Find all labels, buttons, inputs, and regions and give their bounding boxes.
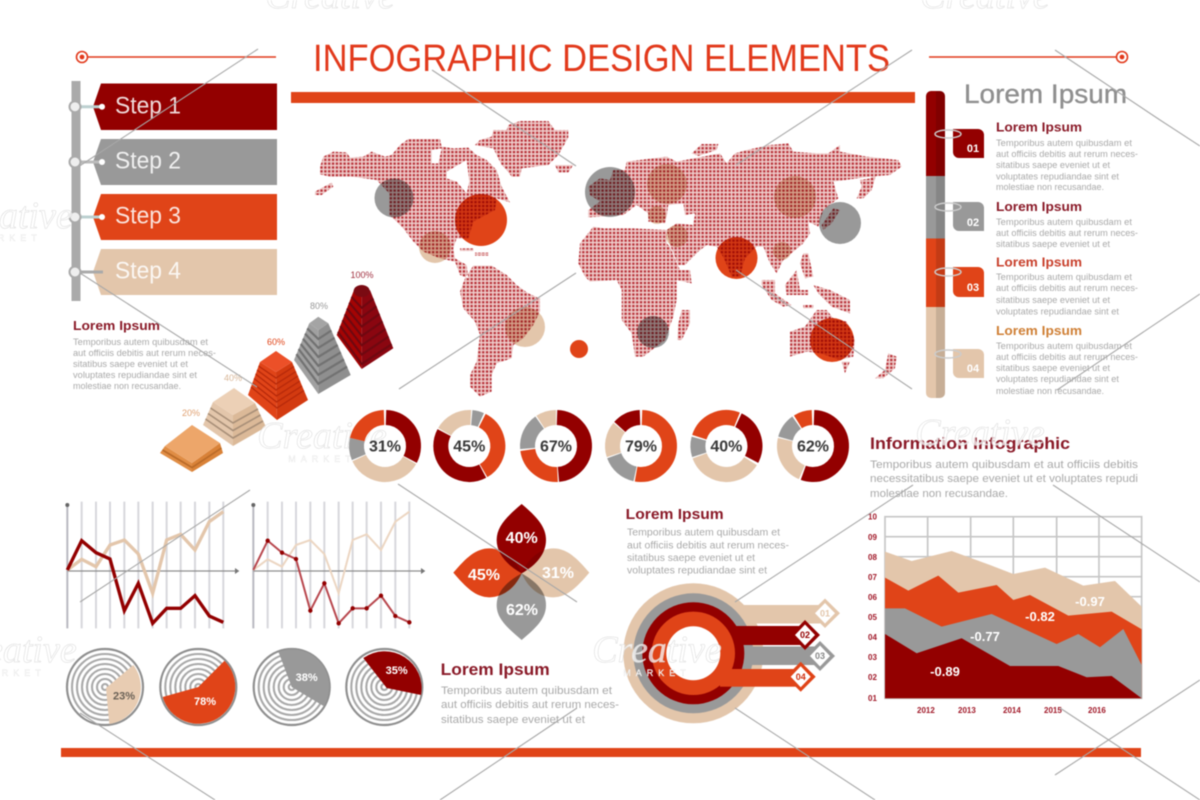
item 03: voluptates repudiandae sint et — [996, 306, 1120, 316]
item 03: Temporibus autem quibusdam et — [996, 272, 1133, 282]
donut 45%: 45% — [453, 438, 485, 456]
text block: center lorem ipsum: Lorem Ipsum — [626, 506, 724, 523]
pyramid 20%: 20% — [182, 408, 200, 418]
y axis labels: 02 — [868, 673, 877, 682]
chart: four leaf percentages: 40% — [506, 530, 538, 547]
text block: left lorem ipsum: aut officiis debitis aut rerum neces- — [73, 348, 216, 358]
text block: left lorem ipsum: sitatibus saepe eveniet ut et — [73, 359, 189, 369]
text block: center lorem ipsum: aut officiis debitis aut rerum neces- — [627, 540, 789, 552]
chart: radial pies — [67, 649, 422, 725]
chart: four leaf percentages: 31% — [542, 565, 574, 582]
chart: isometric pyramids — [160, 270, 393, 472]
chart: four leaf percentages: 62% — [506, 602, 538, 619]
text block: center lorem ipsum: sitatibus saepe eveniet ut et — [627, 553, 755, 564]
text block: lower lorem ipsum: aut officiis debitis aut rerum neces- — [441, 699, 619, 711]
y axis labels: 01 — [868, 694, 877, 703]
pie 23%: 23% — [113, 690, 135, 702]
chart: world map with bubbles — [314, 120, 902, 397]
text block: information infographic: Temporibus autem quibusdam et aut officiis debitis — [870, 459, 1139, 471]
x axis labels: 2013 — [958, 706, 976, 715]
item 04 — [935, 323, 1138, 396]
item 03 — [935, 254, 1138, 316]
item 01: sitatibus saepe eveniet ut et — [996, 160, 1111, 170]
watermark logos — [0, 0, 1050, 678]
watermark logos: Creative — [915, 412, 1045, 454]
text block: information infographic — [870, 434, 1139, 500]
text block: left lorem ipsum — [73, 318, 216, 391]
y axis labels: 03 — [868, 653, 877, 662]
text block: center lorem ipsum — [626, 506, 789, 576]
text block: lower lorem ipsum — [441, 660, 619, 726]
text block: information infographic: molestiae non recusandae. — [870, 488, 1008, 500]
item 04: Temporibus autem quibusdam et — [996, 341, 1133, 351]
pie 38% — [254, 649, 330, 725]
item 01: aut officiis debitis aut rerum neces- — [996, 149, 1138, 159]
pipe marker 01: 01 — [820, 608, 830, 618]
item 03: Lorem Ipsum — [996, 254, 1082, 270]
y axis labels: 04 — [868, 633, 877, 642]
donut 31% — [346, 407, 424, 485]
pyramid 40%: 40% — [224, 373, 242, 383]
step 2: Step 2 — [115, 148, 181, 174]
dotted continents — [314, 120, 902, 397]
item 04: Lorem Ipsum — [996, 323, 1082, 338]
step 2 — [70, 139, 277, 185]
item 01: Temporibus autem quibusdam et — [996, 138, 1133, 148]
watermark logos: Creative — [257, 415, 387, 457]
area values: -0.82 — [1025, 609, 1055, 624]
y axis labels: 05 — [868, 613, 877, 622]
item 03: 03 — [967, 282, 979, 294]
item 02: aut officiis debitis aut rerum neces- — [996, 228, 1138, 238]
text block: center lorem ipsum: Temporibus autem quibusdam et — [627, 528, 780, 538]
panel: right timeline — [926, 79, 1138, 398]
pipe marker 02: 02 — [800, 630, 810, 640]
step 4: Step 4 — [115, 258, 181, 284]
y axis labels — [868, 512, 877, 703]
area values — [930, 594, 1105, 679]
donut 62%: 62% — [797, 438, 829, 456]
item 04: 04 — [967, 363, 980, 375]
item 02 — [935, 199, 1138, 249]
x axis labels: 2014 — [1003, 706, 1021, 715]
item 03: aut officiis debitis aut rerum neces- — [996, 283, 1138, 293]
header rule left — [76, 52, 276, 62]
donut 67% — [517, 407, 595, 485]
step 4 — [70, 249, 277, 295]
item 02: Lorem Ipsum — [996, 199, 1082, 214]
item 02: sitatibus saepe eveniet ut et — [996, 239, 1111, 249]
chart: concentric ring pipes — [623, 583, 840, 723]
item 02: Temporibus autem quibusdam et — [996, 217, 1133, 227]
pipe marker 03: 03 — [815, 651, 825, 661]
step 1: Step 1 — [115, 92, 181, 120]
text block: lower lorem ipsum: Temporibus autem quibusdam et — [441, 685, 612, 697]
watermark logos: MARKET — [288, 454, 356, 464]
pyramid 80%: 80% — [310, 301, 328, 311]
y axis labels: 06 — [868, 593, 877, 602]
area values: -0.97 — [1075, 594, 1105, 609]
text block: information infographic: necessitatibus saepe eveniet ut et voluptates repudi — [870, 473, 1138, 485]
item 01: voluptates repudiandae sint et — [996, 172, 1120, 182]
area values: -0.77 — [970, 629, 1000, 644]
pipe marker 04 — [786, 662, 816, 692]
item 01 — [935, 120, 1138, 192]
pipe marker 04: 04 — [796, 672, 806, 682]
title: INFOGRAPHIC DESIGN ELEMENTS — [313, 38, 890, 80]
x axis labels: 2012 — [917, 706, 935, 715]
area values: -0.89 — [930, 664, 960, 679]
chart: stacked area — [868, 512, 1142, 715]
pie 23% — [67, 649, 143, 725]
y axis labels: 07 — [868, 573, 877, 582]
pie 35% — [346, 649, 422, 725]
pie 38%: 38% — [296, 672, 318, 684]
text block: information infographic: Information Infographic — [870, 434, 1070, 453]
donut 79% — [601, 406, 681, 486]
text block: lower lorem ipsum: sitatibus saepe eveniet ut et — [441, 714, 585, 726]
text block: center lorem ipsum: voluptates repudiandae sint et — [627, 566, 767, 576]
footer bar — [61, 748, 1141, 757]
text block: left lorem ipsum: Temporibus autem quibusdam et — [73, 337, 209, 347]
donut 62% — [774, 407, 852, 485]
chart: four leaf percentages — [453, 504, 589, 640]
pipe marker 03 — [805, 641, 835, 671]
watermark logos: MARKET — [623, 668, 691, 678]
pie 35%: 35% — [386, 665, 408, 677]
text block: left lorem ipsum: molestiae non recusandae. — [73, 381, 181, 391]
item 01: Lorem Ipsum — [996, 120, 1082, 134]
x axis labels: 2015 — [1044, 706, 1062, 715]
pie 78% — [160, 649, 236, 725]
item 02: 02 — [967, 217, 979, 229]
y axis labels: 10 — [868, 512, 877, 522]
donut 79%: 79% — [625, 438, 657, 456]
item 03: sitatibus saepe eveniet ut et — [996, 295, 1111, 305]
pyramid 80% — [294, 301, 351, 394]
item 04: molestiae non recusandae. — [996, 386, 1104, 396]
donut 45% — [430, 407, 508, 485]
pyramid 20% — [160, 408, 223, 472]
pyramid 100%: 100% — [350, 270, 374, 280]
text block: left lorem ipsum: voluptates repudiandae sint et — [73, 370, 198, 380]
donut 40% — [687, 407, 766, 485]
step 3 — [70, 194, 277, 240]
donut 40%: 40% — [710, 438, 742, 456]
chart: line chart thin with markers — [251, 502, 425, 628]
item 04: voluptates repudiandae sint et — [996, 374, 1120, 384]
chart: four leaf percentages: 45% — [468, 567, 500, 584]
text block: left lorem ipsum: Lorem Ipsum — [73, 318, 160, 333]
map bubbles — [374, 164, 861, 362]
pipe marker 02 — [790, 620, 820, 650]
heading: Lorem Ipsum — [964, 79, 1127, 109]
text block: lower lorem ipsum: Lorem Ipsum — [441, 660, 550, 679]
y axis labels: 09 — [868, 533, 877, 542]
chart: donut row — [346, 406, 852, 486]
step 1 — [70, 84, 277, 130]
item 04: sitatibus saepe eveniet ut et — [996, 363, 1111, 373]
x axis labels — [917, 706, 1106, 715]
pyramid 100% — [337, 270, 393, 369]
step 3: Step 3 — [115, 202, 181, 230]
donut 31%: 31% — [369, 438, 401, 456]
x axis labels: 2016 — [1088, 706, 1106, 715]
donut 67%: 67% — [540, 438, 572, 456]
vertical segmented bar — [926, 91, 945, 398]
y axis labels: 08 — [868, 553, 877, 562]
pyramid 40% — [203, 373, 266, 446]
pyramid 60% — [248, 337, 308, 420]
title underline bar — [291, 92, 915, 103]
item 04: aut officiis debitis aut rerum neces- — [996, 352, 1138, 362]
panel: steps — [70, 81, 277, 301]
item 01: 01 — [967, 143, 979, 155]
chart: line chart bold — [65, 502, 239, 628]
pie 78%: 78% — [194, 696, 216, 708]
pipe marker 01 — [810, 598, 840, 628]
header rule right — [929, 52, 1128, 62]
watermark logos: Creative — [592, 629, 722, 671]
item 01: molestiae non recusandae. — [996, 182, 1104, 192]
pyramid 60%: 60% — [267, 337, 285, 347]
